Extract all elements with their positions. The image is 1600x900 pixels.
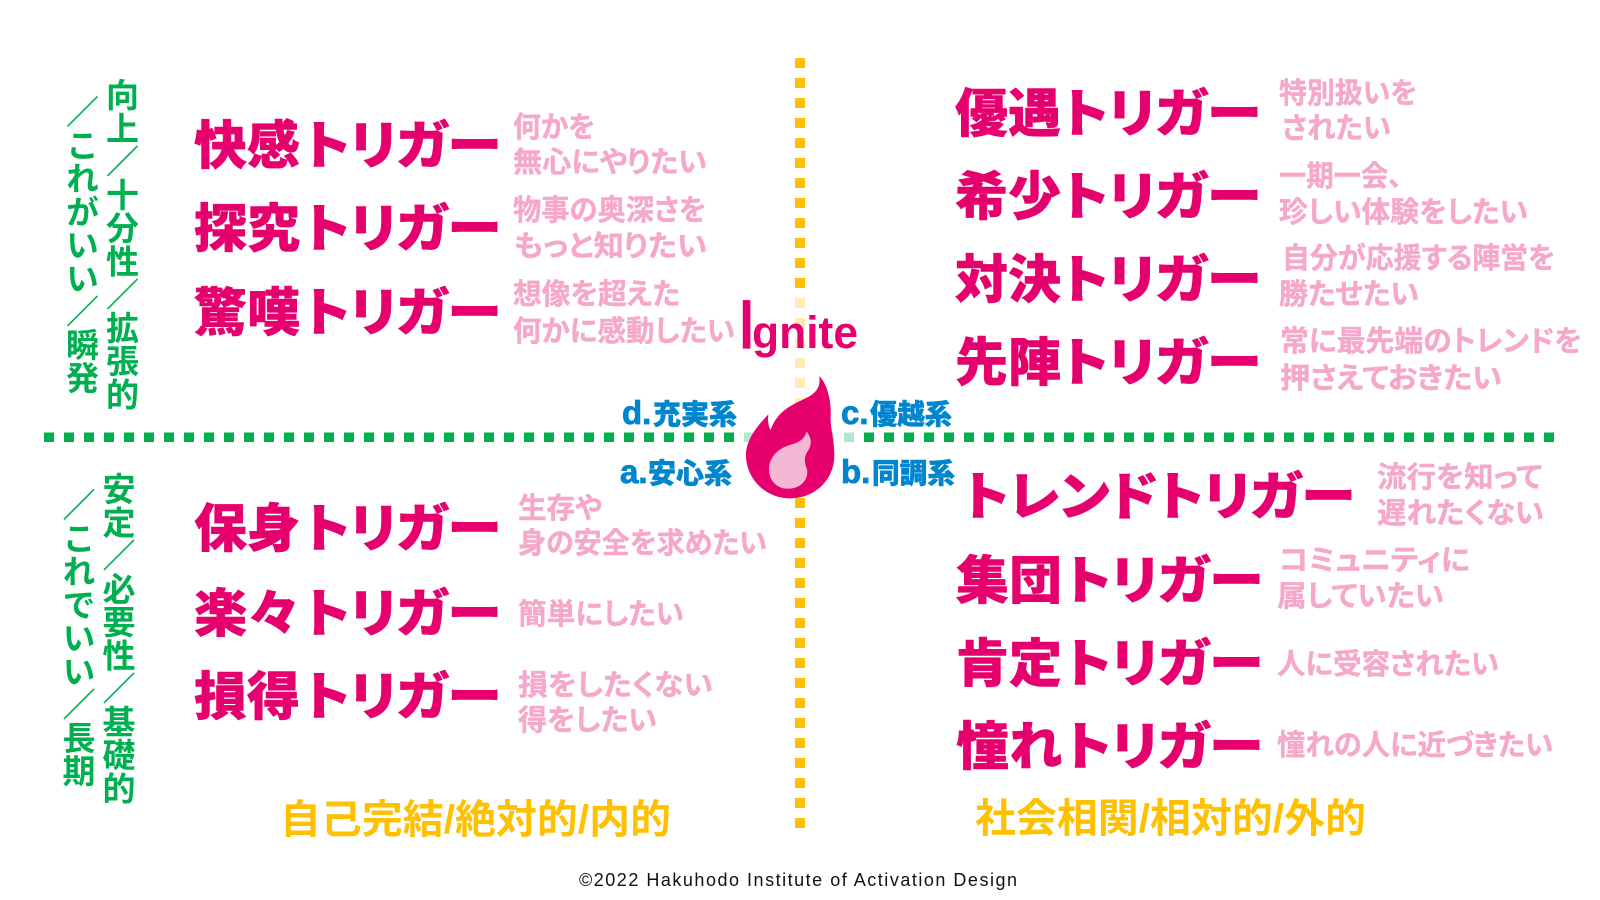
vertical axis label: upper — [62, 78, 139, 410]
logo: Ignite wordmark: gnite — [752, 307, 858, 358]
trigger: 驚嘆: トリガー — [304, 285, 501, 343]
vertical axis label: lower: 安定／必要性／基礎的 — [98, 472, 136, 804]
trigger: 優遇: トリガー — [1062, 86, 1261, 144]
logo: Ignite wordmark — [737, 286, 858, 363]
vertical axis label: lower: ／これでいい／長期 — [58, 488, 96, 787]
trigger: 驚嘆 — [194, 278, 735, 348]
trigger: 驚嘆: 想像を超えた — [513, 278, 680, 311]
trigger: 快感: トリガー — [304, 118, 501, 176]
trigger: 肯定: トリガー — [1065, 636, 1263, 694]
quadrant label: b: b. — [841, 453, 870, 490]
trigger: 驚嘆: 何かに感動したい — [513, 315, 735, 348]
trigger: 希少: トリガー — [1062, 169, 1261, 227]
logo: Ignite wordmark: I — [737, 286, 756, 363]
axis label: left: 自己完結/絶対的/内的 — [280, 798, 671, 842]
trigger: 先陣: トリガー — [1062, 335, 1261, 393]
trigger: トレンド: 流行を知って — [1377, 461, 1542, 494]
trigger: 保身: 生存や — [518, 492, 602, 525]
trigger: 希少: 珍しい体験をしたい — [1279, 196, 1528, 229]
trigger: 保身: 身の安全を求めたい — [518, 527, 767, 560]
trigger: 肯定: 人に受容されたい — [1277, 648, 1499, 681]
trigger: トレンド: トレンドトリガー — [963, 469, 1355, 527]
quadrant label: c: 優越系 — [870, 399, 952, 430]
trigger: 対決: 勝たせたい — [1279, 278, 1419, 311]
trigger: 優遇: 優遇 — [955, 86, 1061, 144]
icon: flame — [746, 376, 834, 498]
quadrant label: d — [622, 394, 737, 431]
quadrant label: a: 安心系 — [648, 458, 732, 489]
quadrant label: d: d. — [622, 394, 651, 431]
panel: d. upper-left triggers — [194, 111, 735, 348]
trigger: 対決: 自分が応援する陣営を — [1282, 241, 1555, 275]
trigger: 希少: 一期一会、 — [1279, 160, 1402, 193]
quadrant label: c — [841, 394, 952, 431]
trigger: 肯定: 肯定 — [956, 636, 1062, 694]
axis label: right: 社会相関/相対的/外的 — [975, 797, 1366, 841]
trigger: 損得: トリガー — [304, 669, 501, 727]
trigger: 肯定 — [956, 636, 1499, 694]
panel: a. lower-left triggers — [194, 492, 767, 737]
trigger: 保身: トリガー — [304, 501, 501, 559]
trigger: 楽々: 楽々 — [194, 586, 300, 644]
trigger: トレンド — [963, 461, 1544, 530]
trigger: 探究: 物事の奥深さを — [513, 194, 706, 227]
trigger: 対決 — [955, 241, 1555, 311]
trigger: 保身: 保身 — [194, 501, 300, 559]
quadrant label: a — [620, 453, 732, 490]
trigger: 楽々: トリガー — [304, 586, 501, 644]
trigger: 集団: 集団 — [956, 553, 1062, 611]
trigger: 憧れ: 憧れの人に近づきたい — [1277, 729, 1553, 762]
trigger: 探究: 探究 — [194, 201, 300, 259]
panel: b. lower-right triggers — [956, 461, 1553, 777]
vertical axis label: lower — [58, 472, 136, 804]
trigger: 集団: コミュニティに — [1279, 545, 1470, 577]
trigger: 保身 — [194, 492, 767, 560]
trigger: 憧れ — [956, 719, 1553, 777]
trigger: 快感: 何かを — [513, 111, 595, 144]
trigger: 先陣 — [955, 325, 1582, 395]
vertical axis label: upper: ／これがいい／瞬発 — [62, 95, 99, 394]
quadrant label: a: a. — [620, 453, 648, 490]
trigger: 憧れ: 憧れ — [956, 719, 1062, 777]
trigger: 先陣: 常に最先端のトレンドを — [1280, 325, 1582, 358]
trigger: 優遇: 特別扱いを — [1279, 77, 1417, 110]
trigger: 探究: もっと知りたい — [514, 230, 707, 263]
quadrant label: c: c. — [841, 394, 869, 431]
trigger: 希少: 希少 — [955, 169, 1061, 227]
trigger: 対決: トリガー — [1062, 252, 1261, 310]
trigger: 集団 — [956, 545, 1470, 613]
trigger: 探究 — [194, 194, 707, 263]
trigger: 優遇: されたい — [1282, 113, 1391, 145]
trigger: 対決: 対決 — [955, 252, 1061, 310]
trigger: 希少 — [955, 160, 1528, 229]
trigger: 探究: トリガー — [304, 201, 501, 259]
quadrant label: b — [841, 453, 955, 490]
trigger: 損得 — [194, 669, 713, 737]
trigger: 集団: トリガー — [1065, 553, 1263, 611]
trigger: 快感: 無心にやりたい — [513, 146, 707, 179]
quadrant label: d: 充実系 — [653, 399, 737, 430]
trigger: 快感: 快感 — [194, 118, 300, 176]
trigger: 先陣: 押さえておきたい — [1280, 362, 1502, 395]
trigger: 損得: 得をしたい — [518, 704, 657, 737]
trigger: 憧れ: トリガー — [1065, 719, 1263, 777]
vertical axis label: upper: 向上／十分性／拡張的 — [102, 78, 139, 410]
copyright: ©2022 Hakuhodo Institute of Activation Design — [579, 870, 1017, 890]
panel: c. upper-right triggers — [955, 77, 1582, 395]
trigger: 損得: 損をしたくない — [518, 669, 713, 702]
trigger: 快感 — [194, 111, 707, 179]
trigger: 楽々 — [194, 586, 684, 644]
trigger: 集団: 属していたい — [1277, 581, 1444, 613]
quadrant label: b: 同調系 — [872, 458, 955, 489]
trigger: 先陣: 先陣 — [955, 335, 1061, 393]
trigger: 楽々: 簡単にしたい — [518, 598, 684, 631]
trigger: 優遇 — [955, 77, 1417, 145]
trigger: 驚嘆: 驚嘆 — [194, 285, 300, 343]
trigger: 損得: 損得 — [194, 669, 300, 727]
trigger: トレンド: 遅れたくない — [1377, 498, 1544, 530]
